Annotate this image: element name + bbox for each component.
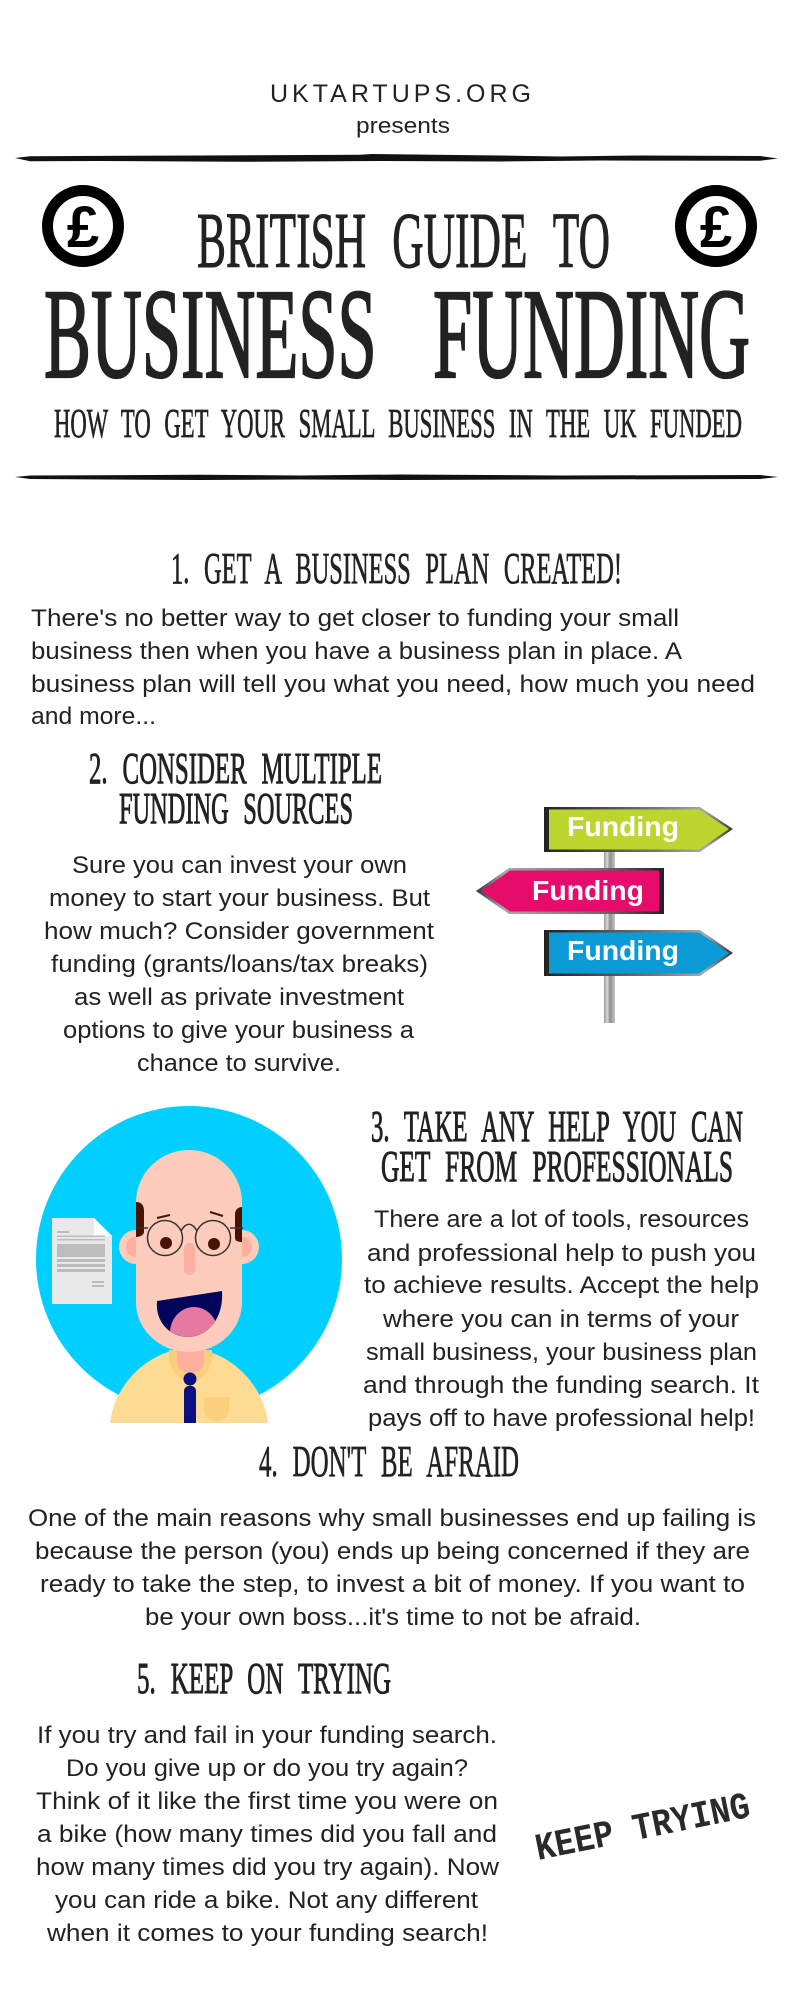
illustration: smiling professional xyxy=(36,1106,342,1423)
body text 5: when it comes to your funding search! xyxy=(46,1920,488,1947)
brand name: UKTARTUPS.ORG xyxy=(270,80,531,108)
body text 4 xyxy=(28,1505,756,1631)
heading 4: 4. DON'T BE AFRAID xyxy=(259,1437,519,1486)
body text 3: pays off to have professional help! xyxy=(368,1405,755,1432)
eyebrows xyxy=(157,1212,223,1218)
blue circle xyxy=(36,1106,342,1412)
body text 3: and through the funding search. It xyxy=(363,1372,759,1399)
mouth xyxy=(157,1291,222,1337)
head xyxy=(136,1150,242,1352)
body text 5: If you try and fail in your funding search. xyxy=(37,1722,497,1749)
section 3 xyxy=(36,1102,759,1432)
blue sign: Funding xyxy=(567,935,679,966)
pink sign: Funding xyxy=(532,875,644,906)
icon: pound coin left: £ xyxy=(67,195,99,260)
body text 5: Think of it like the first time you were on xyxy=(36,1788,498,1815)
heading 5: 5. KEEP ON TRYING xyxy=(137,1654,391,1703)
body text 2: chance to survive. xyxy=(137,1050,341,1077)
presents label: presents xyxy=(356,113,450,138)
body text 4: be your own boss...it's time to not be afraid. xyxy=(145,1604,641,1631)
body text 1: There's no better way to get closer to funding your small xyxy=(31,605,679,632)
hair xyxy=(136,1202,242,1242)
body text 4: One of the main reasons why small businesses end up failing is xyxy=(28,1505,756,1532)
heading 2: FUNDING SOURCES xyxy=(119,784,353,833)
top brush stroke xyxy=(15,154,778,162)
body text 1: business plan will tell you what you need, how much you need xyxy=(31,671,755,698)
section 4 xyxy=(28,1437,756,1631)
body text 3: There are a lot of tools, resources xyxy=(374,1206,749,1233)
body text 2 xyxy=(44,852,434,1077)
icon: pound coin right xyxy=(680,190,752,262)
body text 5: you can ride a bike. Not any different xyxy=(55,1887,478,1914)
green sign xyxy=(544,807,733,852)
document xyxy=(52,1218,112,1304)
body text 3: and professional help to push you xyxy=(367,1240,756,1267)
heading 2 xyxy=(89,744,382,833)
section 2 xyxy=(44,744,733,1077)
body text 2: as well as private investment xyxy=(74,984,404,1011)
body text 1: business then when you have a business plan in place. A xyxy=(31,638,682,665)
heading 3 xyxy=(371,1102,743,1191)
body text 3: where you can in terms of your xyxy=(382,1306,739,1333)
body text 3: to achieve results. Accept the help xyxy=(364,1272,759,1299)
header xyxy=(15,80,778,480)
eyes xyxy=(160,1237,220,1250)
icon: funding signpost xyxy=(476,807,733,1023)
pocket xyxy=(204,1397,229,1421)
ears xyxy=(119,1230,259,1264)
body text 1: and more... xyxy=(31,703,156,730)
section 1 xyxy=(31,544,755,730)
icon: pound coin right: £ xyxy=(700,195,732,260)
sign post xyxy=(604,850,615,1023)
body text 4: ready to take the step, to invest a bit of money. If you want to xyxy=(40,1571,745,1598)
bottom brush stroke xyxy=(15,474,778,480)
heading 2: 2. CONSIDER MULTIPLE xyxy=(89,744,382,793)
green sign: Funding xyxy=(567,811,679,842)
icon: pound coin left xyxy=(48,190,118,262)
body text 1 xyxy=(31,605,755,730)
body text 2: money to start your business. But xyxy=(49,885,430,912)
body text 5: how many times did you try again). Now xyxy=(36,1854,500,1881)
stamp: keep trying: KEEP TRYING xyxy=(532,1786,754,1872)
section 5 xyxy=(36,1654,754,1947)
body text 3: small business, your business plan xyxy=(366,1339,757,1366)
tie xyxy=(184,1372,196,1423)
pink sign xyxy=(476,868,664,914)
body text 3 xyxy=(363,1206,759,1432)
blue sign xyxy=(544,930,733,976)
shirt xyxy=(110,1348,268,1423)
body text 2: options to give your business a xyxy=(63,1017,415,1044)
glasses xyxy=(136,1220,243,1256)
body text 5: a bike (how many times did you fall and xyxy=(37,1821,497,1848)
body text 4: because the person (you) ends up being concerned if they are xyxy=(35,1538,750,1565)
body text 5: Do you give up or do you try again? xyxy=(66,1755,468,1782)
body text 2: how much? Consider government xyxy=(44,918,434,945)
nose xyxy=(184,1243,195,1275)
body text 5 xyxy=(36,1722,500,1947)
neck xyxy=(177,1345,204,1373)
body text 2: funding (grants/loans/tax breaks) xyxy=(51,951,428,978)
collar xyxy=(169,1350,212,1382)
tongue xyxy=(170,1307,216,1337)
body text 2: Sure you can invest your own xyxy=(72,852,407,879)
